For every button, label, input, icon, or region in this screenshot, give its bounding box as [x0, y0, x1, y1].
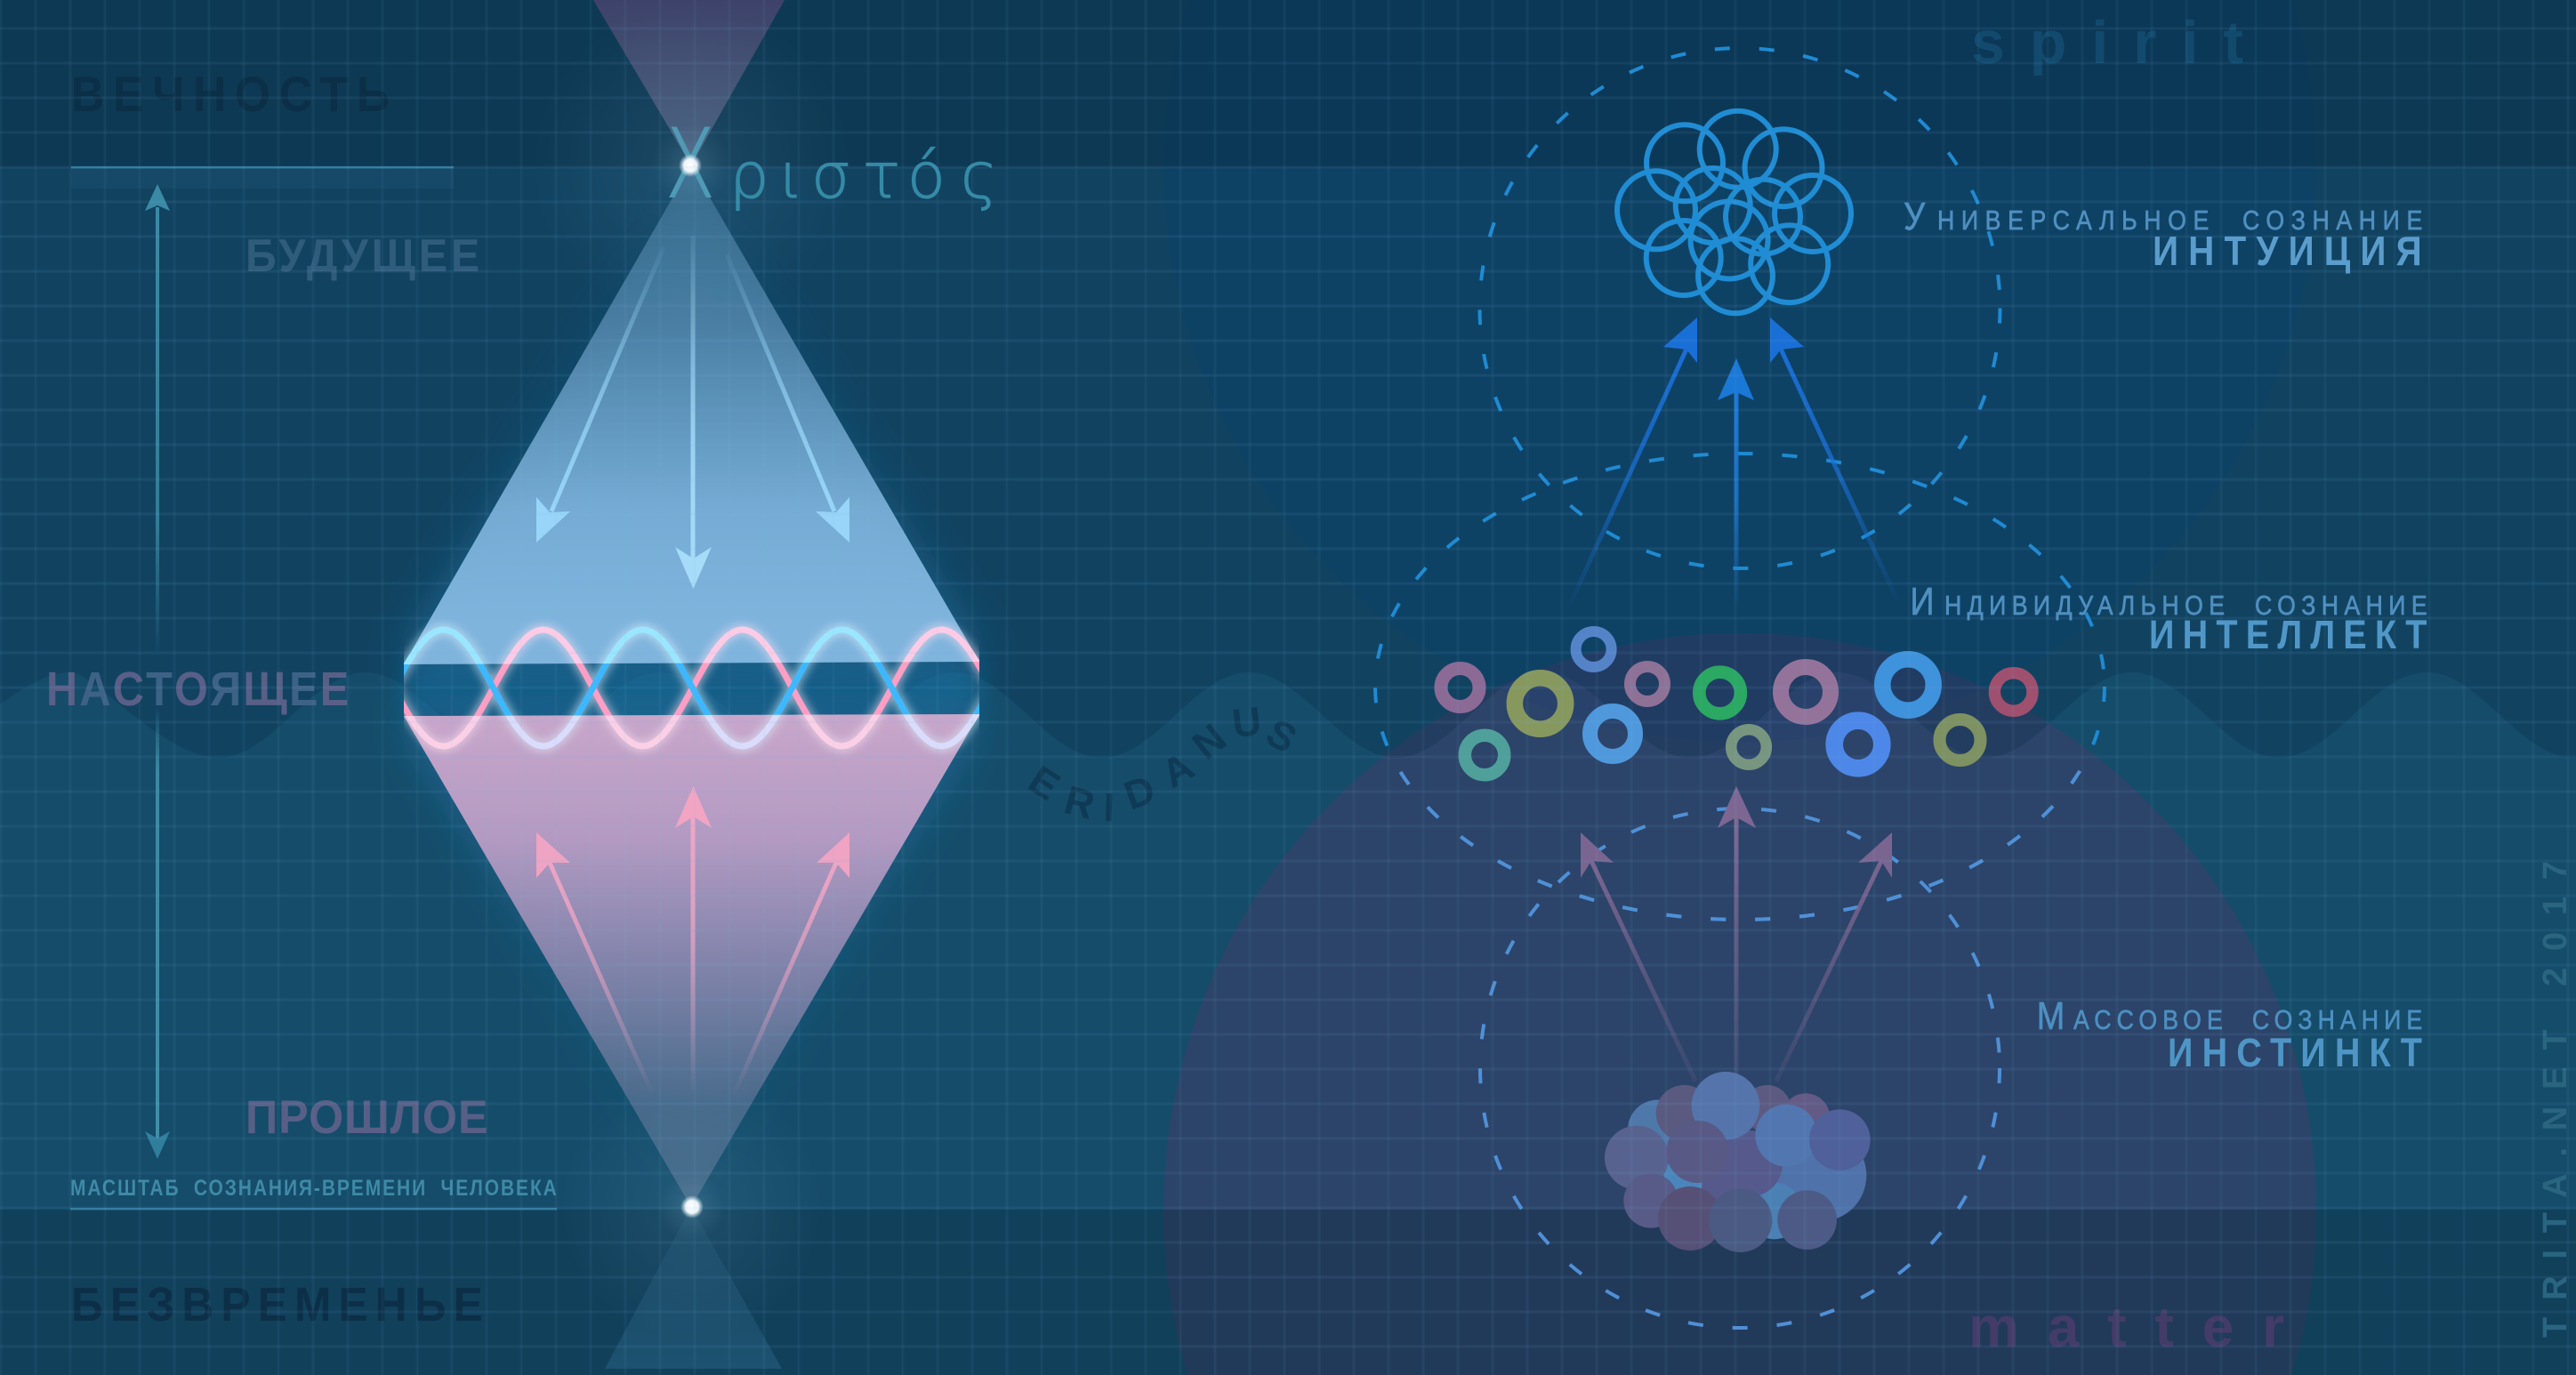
top line glow	[71, 169, 454, 189]
timelessness band	[0, 1210, 2576, 1375]
halo around top point	[531, 5, 851, 326]
present band glow	[404, 662, 979, 717]
arrow: time scale down	[145, 707, 170, 1159]
mass blob cluster	[1605, 1072, 1871, 1252]
upper cone above Christ point	[593, 0, 785, 165]
arrow: future centre	[675, 236, 712, 589]
matter label: matter	[1968, 1295, 2284, 1359]
timelessness heading: БЕЗВРЕМЕНЬЕ	[71, 1277, 483, 1331]
credit vertical: TRITA.NET 2017	[2537, 861, 2574, 1338]
bottom light point	[680, 1195, 704, 1218]
spirit label: spirit	[1971, 9, 2243, 76]
arrow: mass left	[1581, 832, 1695, 1081]
label: intellect: ИНТЕЛЛЕКТ	[2149, 613, 2427, 657]
present label: НАСТОЯЩЕЕ	[46, 662, 349, 716]
lower cone below bottom point	[605, 1207, 782, 1369]
future triangle	[404, 165, 979, 664]
label: intuition: ИНТУИЦИЯ	[2153, 229, 2422, 275]
eternity band	[0, 0, 2576, 167]
label: individual consciousness: И	[1910, 579, 1934, 623]
past triangle glow	[404, 714, 979, 1207]
dashed circle: universal	[1480, 48, 2000, 568]
halo around bottom point	[558, 1073, 825, 1340]
Christos title: Χ	[666, 109, 714, 219]
future triangle glow	[404, 165, 979, 664]
dashed ellipse: individual	[1375, 454, 2105, 920]
arrow: blue centre	[1718, 358, 1754, 608]
flower of intuition circles	[1617, 111, 1851, 313]
past triangle	[404, 714, 979, 1207]
label: universal consciousness: НИВЕРСАЛЬНОЕ СОЗНАНИЕ	[1937, 205, 2422, 237]
arrow: past right	[734, 832, 849, 1095]
arrow: blue right	[1770, 318, 1899, 604]
dashed circle: mass	[1480, 808, 2000, 1328]
eternity heading: ВЕЧНОСТЬ	[71, 67, 390, 122]
top light point	[679, 154, 702, 177]
double helix	[343, 630, 1041, 746]
label: mass consciousness: М	[2037, 993, 2065, 1038]
arrow: mass right	[1776, 832, 1892, 1081]
matter circle	[1163, 633, 2316, 1375]
label: instinct: ИНСТИНКТ	[2168, 1031, 2422, 1075]
individuals rings	[1441, 631, 2033, 775]
past label: ПРОШЛОЕ	[246, 1090, 488, 1143]
eternity line	[71, 166, 454, 169]
label: universal consciousness: У	[1904, 194, 1926, 238]
Christos title: ριστός	[729, 140, 997, 213]
arrow: blue left	[1568, 318, 1697, 608]
future label: БУДУЩЕЕ	[246, 229, 479, 281]
scale caption: МАСШТАБ СОЗНАНИЯ-ВРЕМЕНИ ЧЕЛОВЕКА	[70, 1175, 557, 1200]
label: individual consciousness: НДИВИДУАЛЬНОЕ СОЗНАНИЕ	[1944, 591, 2427, 622]
spirit circle	[1163, 0, 2316, 742]
arrow: past centre	[675, 786, 712, 1095]
arrow: future left	[536, 247, 664, 543]
arrow: time scale up	[145, 184, 170, 658]
Eridanus label: ERIDANUS	[1021, 698, 1304, 830]
arrow: future right	[727, 254, 849, 543]
timelessness baseline	[70, 1208, 557, 1210]
arrow: mass centre	[1718, 786, 1756, 1076]
arrow: past left	[536, 832, 653, 1095]
label: mass consciousness: АССОВОЕ СОЗНАНИЕ	[2073, 1005, 2422, 1036]
Eridanus wave	[0, 0, 2576, 758]
